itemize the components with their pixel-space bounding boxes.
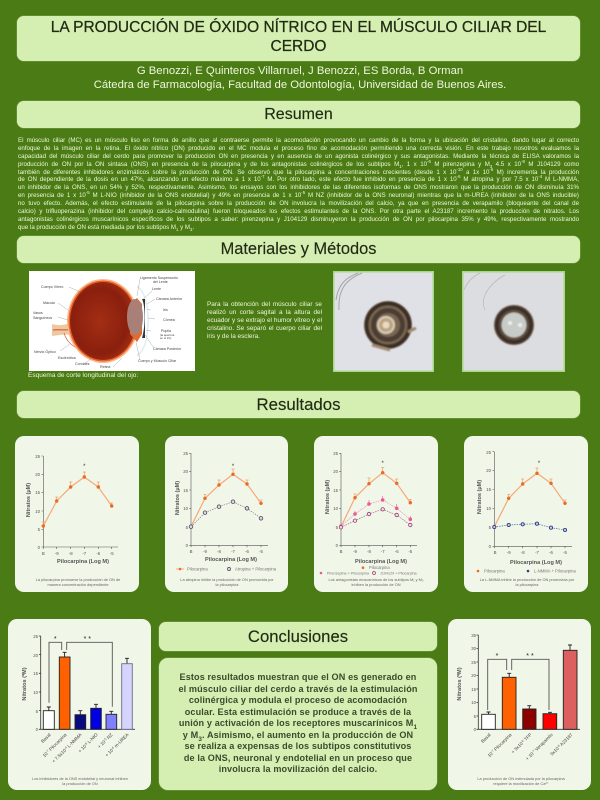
bar labels: 10 — [487, 751, 494, 758]
y axis labels: 10 — [35, 509, 41, 514]
heading: Resumen: Resumen — [264, 106, 333, 123]
x axis labels: -5 — [408, 549, 413, 554]
bar labels: TFP — [522, 732, 533, 743]
abstract text: no tuvo efecto. Además, el efecto estimulante de la pilocarpina sobre la producción de ON involucra la movilización del calcio, ya que en presencia de verapamilo (bloqueante del canal de — [18, 200, 579, 207]
heading: Resultados: Resultados — [257, 395, 340, 414]
abstract text: capacidad del músculo ciliar del cerdo para promover la producción ON en presencia y en ausencia de un agonista colinérgico y sus antagonistas. Mediante la técnica de ELISA valoramos la — [18, 153, 579, 160]
axis titles — [175, 481, 257, 563]
x axis labels: -9 — [507, 550, 511, 555]
y axis labels: 15 — [35, 490, 41, 495]
y axis labels: 0 — [489, 544, 492, 549]
title: CERDO — [270, 38, 326, 54]
y axis labels: 15 — [333, 488, 339, 493]
y axis labels: 25 — [35, 454, 41, 459]
bar labels: Basal — [480, 732, 492, 744]
line: pirenzepina + pilocarpina — [339, 496, 412, 528]
conclusions text: ocular. Esta estimulación se produce a través de la — [185, 706, 411, 716]
bar labels: A23187 — [558, 732, 574, 748]
significance stars: * * — [84, 636, 91, 643]
y axis labels: 15 — [471, 687, 477, 692]
eye labels: del Lente — [153, 280, 168, 284]
eye labels: Mácula — [43, 301, 55, 305]
y axis labels: 10 — [471, 700, 477, 705]
y axis labels: 5 — [36, 709, 39, 714]
eye labels: Pupila — [161, 329, 171, 333]
y axis labels — [35, 454, 41, 550]
legend: Pilocarpina — [187, 566, 208, 572]
y axis labels: 10 — [486, 506, 492, 511]
eye labels: (la apertura — [160, 333, 175, 337]
heading: Conclusiones — [159, 622, 437, 651]
bar labels: -7 — [490, 749, 495, 754]
bar labels: -7 — [45, 749, 50, 754]
caption: la pilocarpina — [216, 582, 239, 587]
conclusions text: involucra la movilización del calcio. — [219, 764, 377, 774]
legend: Atropina + Pilocarpina — [235, 566, 277, 572]
legend: Pirenzepina + Pilocarpina — [327, 572, 370, 576]
y axis labels: 0 — [38, 545, 41, 550]
bar labels: -7 — [531, 749, 536, 754]
line: pilocarpina — [493, 468, 567, 528]
x axis labels: -5 — [110, 551, 114, 556]
line: pilocarpina — [42, 472, 113, 528]
photo: dissected eye 2 — [462, 271, 565, 372]
y axis labels — [33, 634, 39, 732]
panel: L-NMMA — [464, 436, 588, 592]
bar labels: + 10 — [77, 744, 87, 754]
line: J104129 + pilocarpina — [339, 508, 412, 529]
conclusions text — [159, 658, 437, 790]
legend — [176, 566, 277, 572]
y axis labels — [333, 451, 339, 548]
significance star: * — [538, 461, 541, 467]
x axis labels: -8 — [217, 549, 222, 554]
caption: la pilocarpina — [516, 582, 539, 587]
y axis labels — [471, 633, 477, 732]
legend: J104129 + Pilocarpina — [380, 572, 418, 576]
bar labels — [480, 732, 574, 761]
eye labels: Cámara Anterior — [156, 297, 183, 301]
y axis labels: 30 — [471, 646, 477, 651]
x axis labels: -7 — [82, 551, 87, 556]
abstract text: también de diferentes inhibidores enzimáticos sobre la producción de ON. Se observó que la pilocarpina a concentraciones crecientes (desde 1 x 10-10 a 1x 10-6 M) incrementa la producción — [18, 167, 579, 176]
bar labels: 10 — [42, 751, 49, 758]
x axis labels: -6 — [96, 551, 101, 556]
axis titles: Nitratos (µM) — [325, 480, 331, 514]
x axis labels — [340, 549, 413, 554]
authors and affiliation — [94, 65, 506, 91]
eye labels: Sanguíneos — [33, 316, 52, 320]
abstract text: El músculo ciliar (MC) es un músculo liso en forma de anillo que al contraerse permite la acomodación provocando un cambio de la forma y la ubicación del cristalino, dando lugar al correcto — [18, 137, 579, 144]
y axis labels: 25 — [486, 450, 492, 455]
axis titles — [477, 480, 562, 566]
x axis labels — [494, 550, 568, 555]
x axis labels: -8 — [69, 551, 73, 556]
y axis title: Nitratos (ᶣM) — [456, 667, 463, 701]
significance stars — [496, 653, 534, 660]
photo: dissected eye 1 — [333, 271, 434, 372]
x axis labels: -5 — [259, 549, 264, 554]
significance brackets — [49, 642, 112, 707]
x axis labels: B — [42, 551, 45, 556]
y axis labels: 25 — [33, 634, 39, 639]
bar labels: + 7.5x10 — [51, 748, 67, 764]
caption: Los antagonistas muscarínicos de los subtipos M₁ y M₃ — [328, 577, 424, 582]
y axis labels: 0 — [336, 543, 339, 548]
line: L-NMMA + pilocarpina — [493, 522, 567, 532]
y axis labels: 25 — [333, 451, 339, 456]
panel: muscarinic antagonists — [314, 436, 438, 592]
eye labels: Nervio Óptico — [34, 349, 56, 354]
y axis labels: 20 — [471, 673, 477, 678]
conclusions text: se realiza a expensas de los subtipos constitutivos — [184, 741, 411, 751]
bar labels: -6 — [110, 745, 115, 750]
x axis labels: -7 — [231, 549, 236, 554]
eye labels: Lente — [152, 287, 161, 291]
title: LA PRODUCCIÓN DE ÓXIDO NÍTRICO EN EL MÚSCULO CILIAR DEL — [51, 19, 546, 36]
eye labels: Cámara Posterior — [153, 347, 182, 351]
x axis labels: B — [340, 549, 343, 554]
bar labels: L-NMMA — [65, 732, 83, 749]
authors and affiliation: G Benozzi, E Quinteros Villarruel, J Benozzi, ES Borda, B Orman — [137, 65, 463, 77]
bar labels: -6 — [520, 739, 525, 744]
significance stars: * — [54, 636, 57, 643]
y axis labels: 15 — [486, 487, 492, 492]
y axis labels: 15 — [33, 671, 39, 676]
abstract text: producción de ON por la ON sintasa (ONS) en presencia de la pilocarpina y de los antagonistas colinérgicos de los subtipos M1, 1 x 10-6 M pirenzepina y M3 4.5 x 10-8 M J104129 como — [18, 159, 579, 169]
x axis labels: -9 — [203, 549, 208, 554]
bar labels: -5 — [103, 737, 108, 742]
axis titles: Pilocarpina (Log M) — [510, 560, 562, 566]
x axis labels: -8 — [367, 549, 372, 554]
y axis labels: 25 — [471, 660, 477, 665]
bar labels: Basal — [40, 732, 52, 744]
heading: Materiales y Métodos — [17, 236, 580, 263]
legend — [320, 565, 418, 576]
caption — [180, 577, 274, 587]
axis titles — [325, 480, 407, 565]
bar labels: NZ — [105, 732, 114, 741]
axis titles: Pilocarpina (Log M) — [57, 559, 109, 565]
line: pilocarpina — [189, 469, 263, 528]
eye diagram caption: Esquema de corte longitudinal del ojo: — [28, 372, 138, 379]
bar labels: -6 — [556, 744, 561, 748]
bar labels: + 10 — [97, 739, 107, 749]
bar labels: + 10 — [104, 748, 114, 758]
y axis labels: 20 — [33, 653, 39, 658]
legend: Pilocarpina — [369, 565, 390, 570]
abstract text: un inhibidor de la ONS, en un 54% y 52%, respectivamente. Asimismo, los ensayos con los inhibidores de las diferentes isoformas de ONS mostraron que la producción de ON disminuía 31% — [18, 184, 579, 191]
panel: atropine — [165, 436, 288, 592]
panel: ONS inhibitors bar chart — [8, 619, 151, 790]
significance stars: * — [496, 653, 499, 660]
abstract text: de ON dependiente de la dosis en un 47%, alcanzando un efecto máximo a 1 x 10-7 M. Por otro lado, este efecto fue inhibido en presencia de 1 x 10-6 M atropina y por 7.5 x 10-4 M L-NMMA, — [18, 174, 579, 183]
conclusions text: el músculo ciliar del cerdo a través de la estimulación — [178, 684, 418, 694]
y axis labels: 25 — [183, 451, 189, 456]
significance stars — [54, 636, 91, 643]
panel: calcium bar chart — [448, 619, 591, 790]
caption: la producción de ON — [62, 781, 98, 786]
caption — [480, 577, 575, 587]
x axis labels — [42, 551, 114, 556]
x axis labels: B — [494, 550, 497, 555]
x axis labels: -7 — [535, 550, 540, 555]
axis titles: Nitratos (µM) — [26, 483, 32, 517]
y axis title: Nitratos (ᶣM) — [21, 667, 28, 701]
eye labels: Retina — [100, 365, 110, 369]
y axis labels — [183, 451, 189, 548]
abstract text: en presencia de 1 x 10-5 M L-NIO (inhibidor de la ONS endotelial) y 49% en presencia de 1 x 10-5 M NZ (inhibidor de la ONS neuronal) mientras que la m-UREA (inhibidor de la ONS inducible) — [18, 190, 579, 199]
legend: Pilocarpina — [484, 568, 505, 574]
axis titles: Nitratos (µM) — [477, 480, 483, 514]
bar labels: -5 — [83, 741, 88, 746]
authors and affiliation: Cátedra de Farmacología, Facultad de Odontología, Universidad de Buenos Aires. — [94, 79, 506, 91]
conclusions text: unión y activación de los receptores muscarínicos M1 — [179, 718, 417, 731]
caption — [477, 776, 566, 786]
y axis labels: 0 — [36, 727, 39, 732]
eye labels: en el iris) — [160, 336, 171, 340]
significance stars: * * — [526, 653, 534, 660]
caption: inhiben la producción de ON — [351, 582, 401, 587]
caption: La atropina inhibe la producción de ON promovida por — [180, 577, 274, 582]
eye labels: Iris — [163, 308, 168, 312]
title — [17, 16, 580, 61]
line: atropina + pilocarpina — [189, 500, 263, 528]
y axis labels: 15 — [183, 488, 189, 493]
abstract text: antagonistas colinérgicos muscarínicos específicos de los subtipos a saber: pirenzepina y J104129 disminuyeron la producción de ON por pilocarpina 35% y 49%, respectivamente mostrando — [18, 216, 579, 223]
caption: requiere la movilización de Ca²⁺ — [493, 781, 549, 786]
y axis labels: 20 — [183, 469, 189, 474]
methods text: Para la obtención del músculo ciliar se realizó un corte sagital a la altura del ecuador y se extrajo el humor vítreo y el cristalino. Se separó el cuerpo ciliar del iris y de la esclera. — [207, 301, 322, 340]
caption: La pilocarpina promueve la producción de ON de — [36, 577, 120, 582]
conclusions text: y M3. Asimismo, el aumento en la producción de ON — [183, 730, 413, 742]
y axis labels: 5 — [38, 527, 41, 532]
abstract text: que la producción de ON está mediada por los subtipos M1 y M3. — [18, 224, 194, 232]
panel: pilocarpine dose response — [15, 436, 139, 592]
bar labels: + 10 — [525, 751, 535, 761]
heading: Resumen — [17, 101, 580, 128]
x axis labels: -7 — [381, 549, 385, 554]
caption — [328, 577, 424, 587]
significance star: * — [83, 464, 86, 470]
eye labels: Esclerótica — [58, 356, 76, 360]
axis titles: Pilocarpina (Log M) — [205, 557, 257, 563]
y axis labels — [486, 450, 492, 549]
significance star: * — [232, 464, 235, 470]
bar labels: + 5x10 — [510, 741, 524, 754]
x axis labels: B — [190, 549, 193, 554]
y axis labels: 10 — [183, 506, 189, 511]
bar labels: L-NIO — [86, 732, 99, 745]
bars — [43, 652, 132, 729]
caption — [36, 577, 120, 587]
y axis labels: 5 — [336, 525, 339, 530]
bar labels: m-UREA — [112, 732, 130, 749]
x axis labels: -8 — [521, 550, 525, 555]
y axis labels: 20 — [486, 468, 492, 473]
y axis labels: 20 — [35, 472, 41, 477]
caption: La producción de ON estimulada por la pilocarpina — [477, 776, 566, 781]
bar labels: -4 — [63, 745, 68, 750]
y axis labels: 10 — [33, 690, 39, 695]
conclusions text: de la ONS, neuronal y endotelial en un proceso que — [184, 752, 412, 762]
eye labels — [33, 276, 183, 369]
axis titles: Pilocarpina (Log M) — [355, 559, 407, 565]
abstract text: calcio) y trifluoperazina (inhibidor del complejo calcio-calmodulina) fueron bloqueados los efectos estimulantes de la ONS. Por otra parte el A23187 incremento la producción de nitratos. Los — [18, 208, 579, 215]
bar labels: Pilocarpina — [47, 732, 68, 753]
y axis labels: 20 — [333, 469, 339, 474]
legend — [477, 568, 576, 574]
caption — [32, 776, 128, 786]
y axis labels: 5 — [186, 525, 189, 530]
eye labels: Ligamento Suspensorio — [140, 276, 178, 280]
x axis labels: -5 — [563, 550, 568, 555]
x axis labels: -9 — [55, 551, 59, 556]
eye labels: Cuerpo Vítreo — [41, 285, 63, 289]
conclusions text: Estos resultados muestran que el ON es generado en — [180, 672, 416, 682]
heading: Materiales y Métodos: Materiales y Métodos — [221, 240, 376, 258]
y axis labels: 35 — [471, 633, 477, 638]
heading: Resultados — [17, 391, 580, 418]
abstract text: enfoque de la imagen en la retina. El óxido nítrico (ON) producido en el MC modula el proceso fino de acomodación permitiendo una correcta visión. En este trabajo nosotros evaluamos la — [18, 145, 579, 152]
axis titles — [26, 483, 109, 565]
bar labels: Pilocarpina — [492, 732, 513, 753]
eye diagram — [29, 271, 195, 371]
eye labels: Córnea — [163, 318, 175, 322]
y axis labels: 10 — [333, 506, 339, 511]
axis titles: Nitratos (µM) — [175, 481, 181, 515]
bars — [482, 645, 577, 729]
y axis labels: 5 — [489, 525, 492, 530]
y axis labels: 0 — [186, 543, 189, 548]
caption: manera concentración dependiente — [48, 582, 108, 587]
significance brackets — [488, 659, 549, 710]
caption: Los inhibidores de la ONS endotelial y neuronal inhiben — [32, 776, 128, 781]
caption: La L-NMMA inhibe la producción de ON promovida por — [480, 577, 575, 582]
conclusions text: colinérgica y modula el proceso de acomodación — [189, 695, 407, 705]
bar labels — [40, 731, 130, 764]
legend: L-NMMA + Pilocarpina — [534, 568, 576, 574]
y axis labels: 0 — [474, 727, 477, 732]
eye labels: Cuerpo y Músculo Ciliar — [138, 359, 177, 363]
heading: Conclusiones: Conclusiones — [248, 627, 348, 646]
bar labels: Verapamilo — [533, 732, 554, 753]
x axis labels — [190, 549, 264, 554]
line: pilocarpina — [339, 468, 412, 528]
x axis labels: -9 — [353, 549, 358, 554]
bar labels: 5x10 — [549, 746, 560, 757]
x axis labels: -6 — [245, 549, 250, 554]
y axis labels: 5 — [474, 714, 477, 719]
x axis labels: -6 — [549, 550, 554, 555]
significance star: * — [382, 461, 385, 467]
eye labels: Coroides — [75, 362, 90, 366]
eye labels: Vasos — [33, 311, 43, 315]
abstract text — [18, 137, 580, 232]
x axis labels: -6 — [395, 549, 399, 554]
